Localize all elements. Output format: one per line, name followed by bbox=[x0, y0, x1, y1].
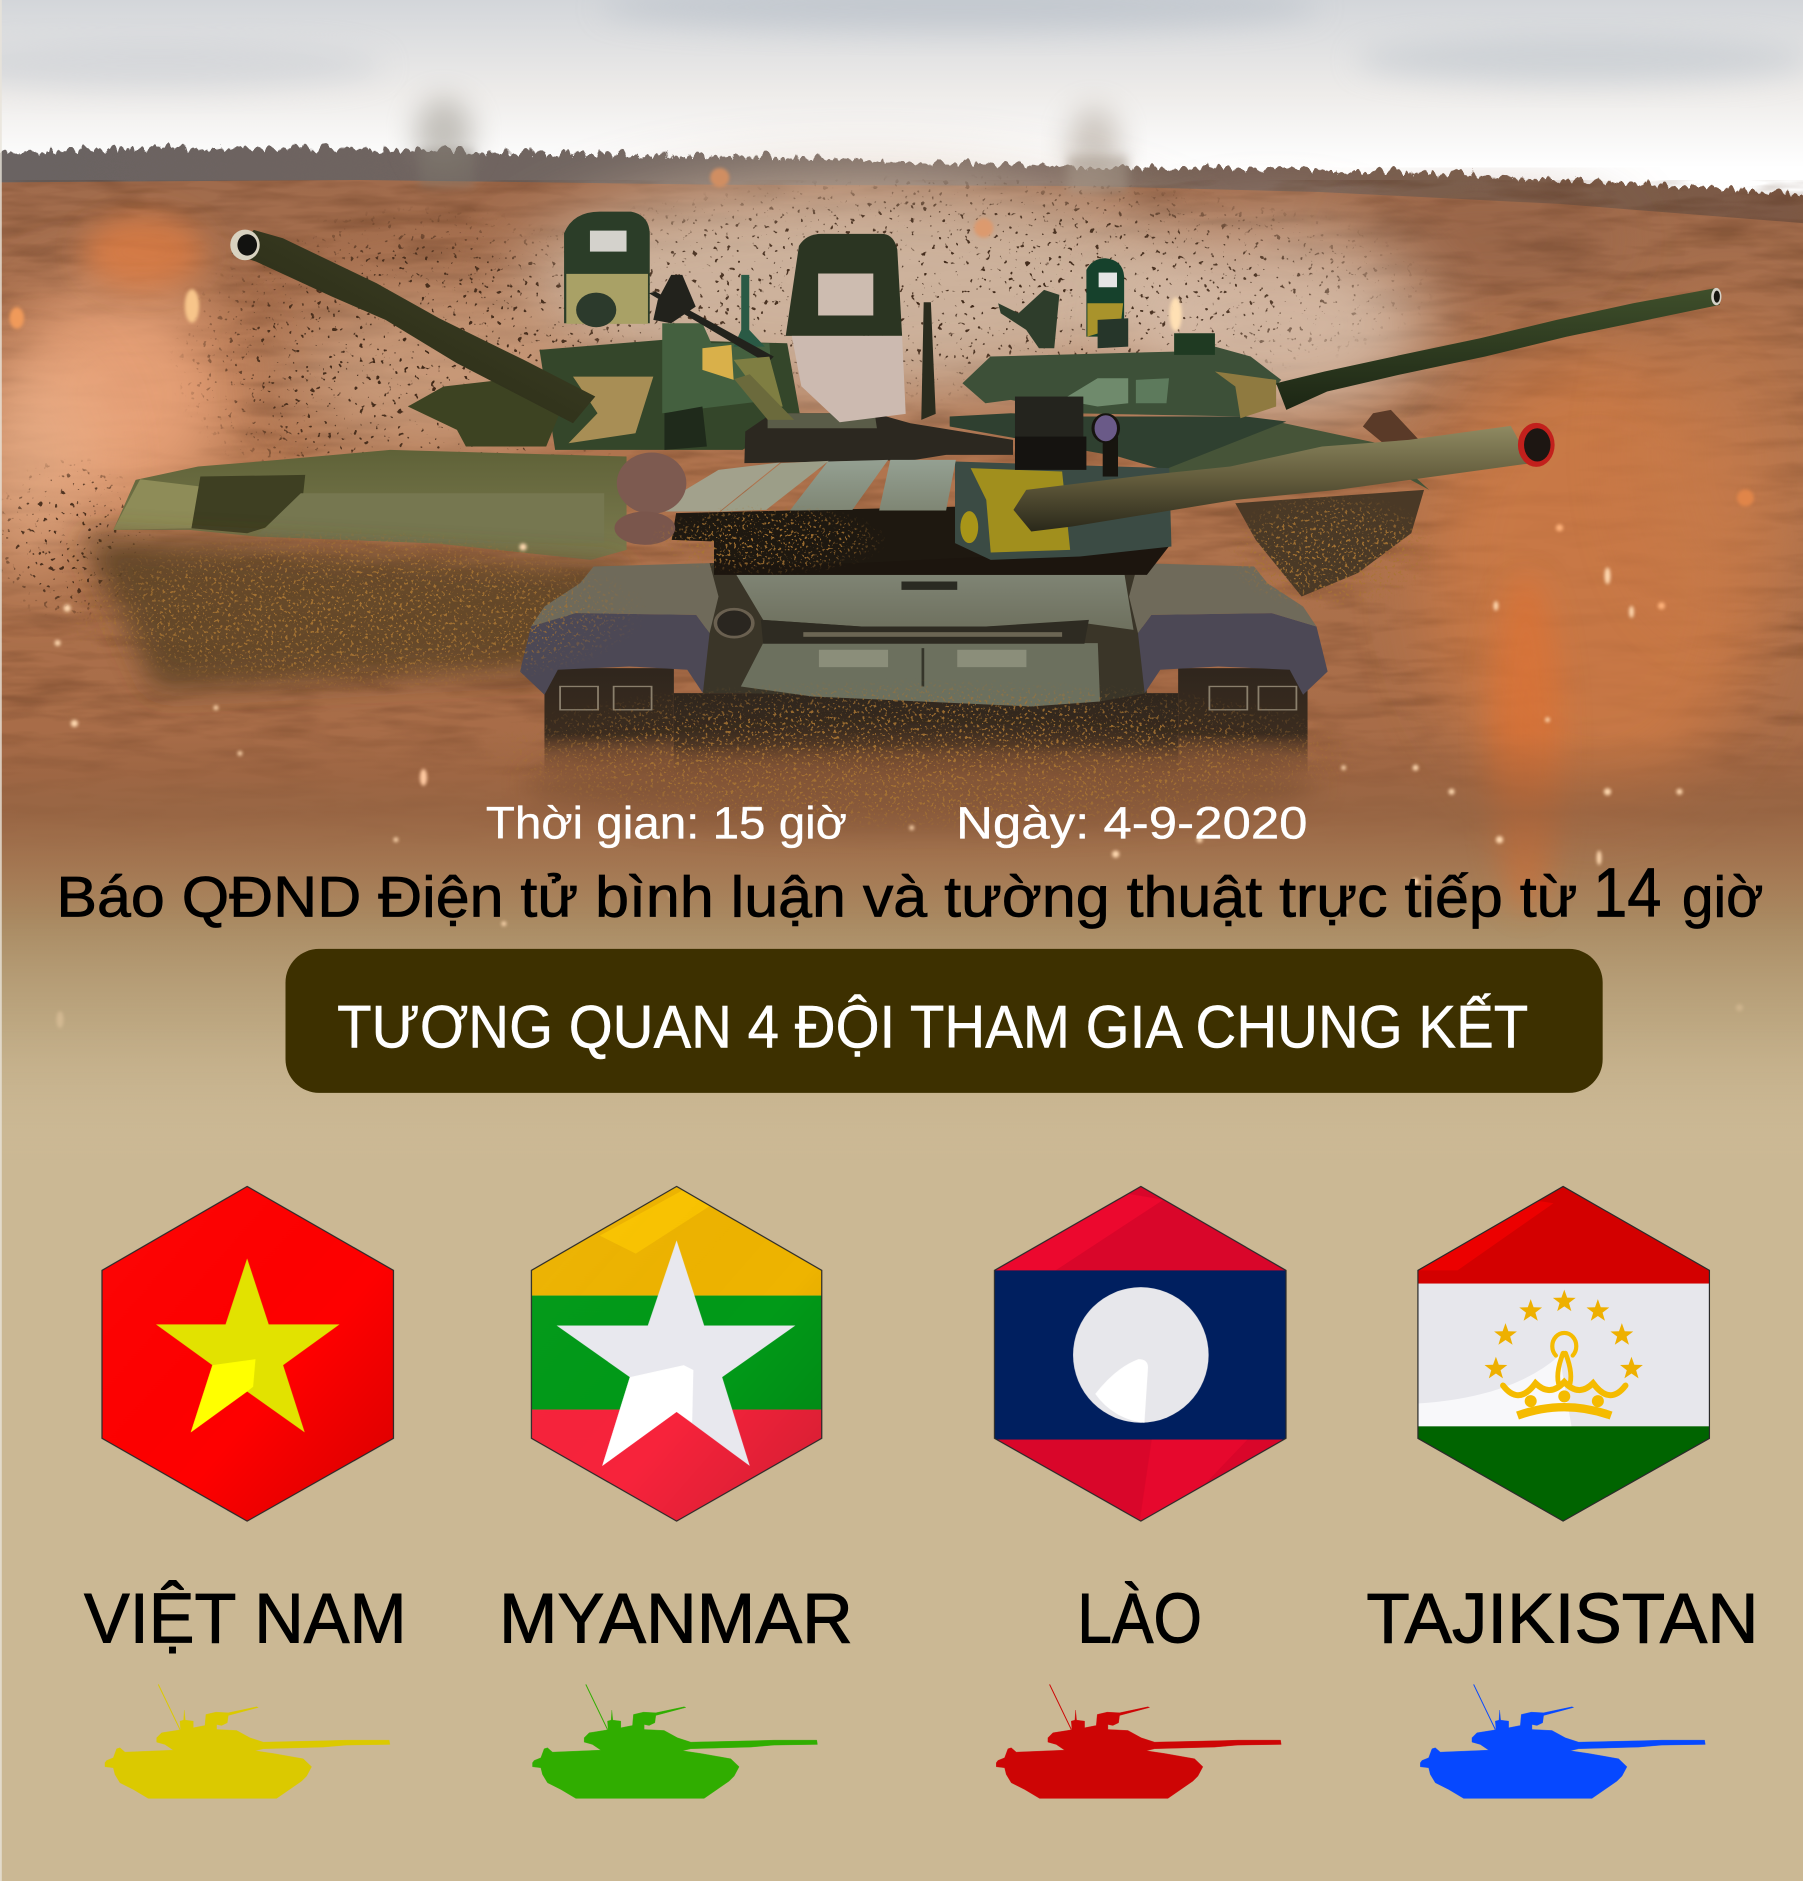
left tank bbox=[113, 212, 800, 560]
right tank shield bbox=[1086, 258, 1124, 337]
Tajik stars bbox=[1485, 1290, 1643, 1378]
dust cloud behind tanks bbox=[288, 180, 1428, 456]
right tank bbox=[950, 258, 1721, 597]
field texture bbox=[2, 180, 1803, 770]
front tank box bbox=[1015, 397, 1083, 437]
tank icon: green bbox=[533, 1684, 817, 1798]
left tank fabric bbox=[569, 377, 653, 443]
front tank turret body bbox=[672, 507, 991, 565]
front tank optic bbox=[1103, 437, 1118, 477]
front tank bbox=[520, 413, 1328, 780]
right tank mud clump bbox=[1363, 410, 1419, 443]
mud behind the left tank tracks bbox=[84, 537, 624, 690]
tank icon: yellow bbox=[105, 1684, 390, 1798]
broadcast line bbox=[56, 854, 1763, 932]
front tank lower hull bbox=[674, 693, 1178, 780]
front tank left fender bbox=[520, 613, 710, 695]
glowing embers bbox=[10, 168, 1754, 1028]
tank icon: blue bbox=[1420, 1684, 1705, 1798]
left tank hull bbox=[113, 450, 627, 560]
front tank yellow fabric bbox=[971, 468, 1070, 552]
broadcast line: Báo QĐND Điện tử bình luận và tường thuật trực tiếp từ bbox=[56, 866, 1577, 930]
front tank upper deck bbox=[744, 413, 1013, 463]
front tank tracks bbox=[544, 668, 1308, 778]
front tank right fender bbox=[1138, 613, 1328, 695]
right tank claw bbox=[998, 290, 1059, 348]
mud and dirt over tank tracks bbox=[2, 496, 1803, 878]
front tank roll bbox=[617, 453, 686, 514]
country names: LÀO bbox=[1077, 1578, 1202, 1657]
flag: Vietnam bbox=[102, 1186, 393, 1521]
right tank turret bbox=[962, 347, 1281, 417]
front tank antenna bbox=[921, 302, 936, 420]
flag: Tajikistan bbox=[1418, 1186, 1709, 1521]
Tajik crown bbox=[1503, 1333, 1625, 1416]
tree line bbox=[0, 144, 1803, 234]
schedule line: time and date bbox=[486, 798, 1308, 849]
fade to tan bbox=[0, 912, 1803, 1164]
left tank shield bbox=[564, 212, 650, 323]
field bbox=[0, 180, 1803, 1140]
left tank rear turret bbox=[540, 340, 800, 450]
sky bbox=[0, 0, 1803, 210]
right tank fabric bbox=[1215, 372, 1276, 418]
schedule line: time and date: Thời gian: 15 giờ bbox=[486, 798, 847, 849]
right tank hull bbox=[1118, 422, 1429, 490]
schedule line: time and date: Ngày: 4-9-2020 bbox=[956, 798, 1308, 849]
flying debris specks bbox=[2, 178, 1422, 620]
broadcast line: giờ bbox=[1682, 866, 1763, 930]
left tank mast bbox=[734, 275, 765, 347]
broadcast line: 14 bbox=[1593, 854, 1661, 932]
flag: Laos bbox=[994, 1186, 1286, 1521]
orange fire glows bbox=[0, 204, 1803, 912]
left tank barrel bbox=[232, 230, 595, 423]
front tank reactive armour bbox=[649, 463, 780, 512]
country names bbox=[84, 1578, 1759, 1657]
country names: MYANMAR bbox=[499, 1578, 853, 1657]
country names: VIỆT NAM bbox=[84, 1578, 407, 1657]
front tank glacis bbox=[736, 575, 1134, 630]
flag: Myanmar bbox=[531, 1186, 823, 1521]
front tank turret underside bbox=[714, 542, 1171, 575]
front tank barrel bbox=[1013, 426, 1531, 532]
tank icon: red bbox=[996, 1684, 1281, 1798]
title banner: TƯƠNG QUAN 4 ĐỘI THAM GIA CHUNG KẾT bbox=[337, 993, 1528, 1060]
smoke plumes on the horizon bbox=[415, 98, 1128, 192]
right tank barrel bbox=[1276, 288, 1720, 410]
front tank shield bbox=[734, 234, 936, 422]
country names: TAJIKISTAN bbox=[1366, 1578, 1759, 1657]
front tank gun and gear bbox=[1013, 397, 1555, 532]
left tank mantlet bbox=[408, 380, 560, 447]
title banner bbox=[286, 949, 1603, 1093]
left tank machine gun bbox=[649, 292, 774, 363]
left edge highlight bbox=[0, 0, 2, 1881]
hero: battlefield photo with tanks bbox=[0, 0, 1803, 1164]
